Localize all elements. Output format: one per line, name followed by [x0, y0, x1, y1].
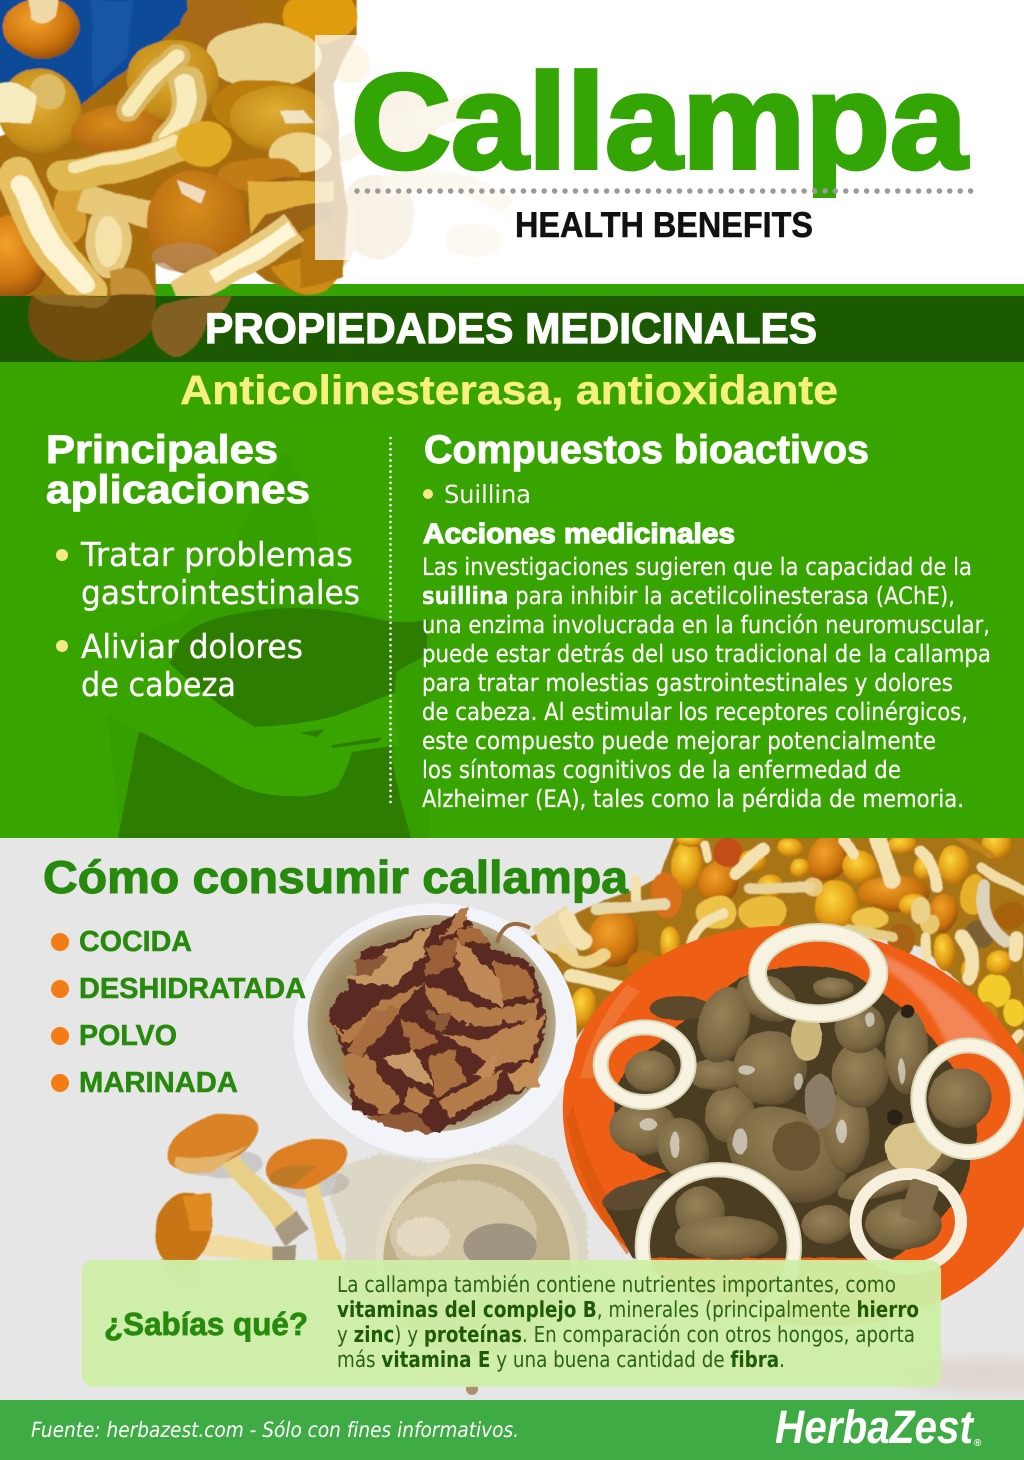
list: aplicaciones — [56, 535, 360, 704]
paragraph: acciones medicinales — [422, 553, 991, 813]
paragraph: acciones medicinales: este compuesto puede mejorar potencialmente — [422, 727, 936, 755]
logo: herbazest: ® — [974, 1438, 982, 1449]
photo: mushrooms top left — [0, 0, 507, 300]
list: aplicaciones: gastrointestinales — [81, 573, 360, 612]
blue cloth — [0, 0, 188, 107]
small drop under callout — [466, 1387, 478, 1395]
footer bar — [0, 1400, 1024, 1460]
braised mushrooms — [598, 965, 992, 1260]
bowl of dried mushrooms — [293, 903, 577, 1158]
callout text: vitaminas del complejo B, minerales (principalmente hierro — [337, 1298, 919, 1323]
compound: suillina: Suillina — [444, 480, 531, 509]
callout text: más vitamina E y una buena cantidad de fibra. — [337, 1348, 785, 1373]
paragraph: acciones medicinales: Alzheimer (EA), tales como la pérdida de memoria. — [422, 785, 964, 813]
callout text: y zinc) y proteínas. En comparación con otros hongos, aporta — [337, 1323, 915, 1348]
orange plate — [562, 923, 1024, 1326]
callout heading: ¿Sabías qué? — [104, 1306, 308, 1342]
footer source: Fuente: herbazest.com - Sólo con fines informativos. — [31, 1418, 519, 1442]
callout: sabias que — [82, 1260, 941, 1387]
paragraph: acciones medicinales: de cabeza. Al estimular los receptores colinérgicos, — [422, 698, 968, 726]
dried mushroom curl — [497, 924, 530, 943]
subtitle: HEALTH BENEFITS — [515, 204, 813, 245]
photo: mushrooms and plate — [146, 830, 1024, 1395]
heading: acciones medicinales: Acciones medicinales — [423, 518, 735, 549]
green panel background — [0, 362, 1024, 838]
list: aplicaciones: de cabeza — [81, 665, 236, 704]
callout box — [82, 1260, 941, 1387]
heading: como consumir callampa: Cómo consumir callampa — [43, 851, 628, 903]
heading: principales aplicaciones — [46, 428, 310, 512]
paragraph: acciones medicinales: para tratar molestias gastrointestinales y dolores — [422, 669, 953, 697]
list: forms of consumption: DESHIDRATADA — [79, 973, 306, 1005]
translucent white title panel — [315, 35, 1024, 260]
heading: principales aplicaciones: Principales — [46, 428, 278, 472]
heading: compuestos bioactivos: Compuestos bioactivos — [424, 428, 869, 472]
golden mass base — [0, 0, 357, 300]
logo: herbazest: HerbaZest — [775, 1400, 975, 1453]
subheading: actions: Anticolinesterasa, antioxidante — [180, 367, 838, 413]
dotted title divider — [357, 188, 972, 194]
callout text — [337, 1273, 919, 1373]
grey lower background — [0, 838, 1024, 1400]
list: aplicaciones: Tratar problemas — [80, 535, 353, 574]
list: forms of consumption: POLVO — [79, 1020, 177, 1052]
onion rings — [601, 932, 1018, 1323]
faint mushrooms behind title — [337, 43, 514, 267]
green header strip — [0, 284, 1024, 296]
heading: propiedades medicinales: PROPIEDADES MEDICINALES — [205, 305, 817, 353]
list: aplicaciones: Aliviar dolores — [81, 627, 303, 666]
title: Callampa — [351, 46, 968, 197]
mushrooms under dark band — [29, 296, 233, 362]
background silhouette: person holding stomach — [50, 450, 430, 838]
paragraph: acciones medicinales: los síntomas cognitivos de la enfermedad de — [422, 756, 901, 784]
list: forms of consumption — [51, 926, 306, 1099]
fresh orange mushrooms — [154, 1112, 350, 1266]
list: forms of consumption: COCIDA — [79, 926, 192, 958]
dark green band — [0, 296, 1024, 362]
list: forms of consumption: MARINADA — [79, 1067, 238, 1099]
paragraph: acciones medicinales: suillina para inhibir la acetilcolinesterasa (AChE), — [422, 582, 955, 610]
bowl of mushroom powder — [328, 1142, 590, 1260]
callout text: La callampa también contiene nutrientes importantes, como — [337, 1273, 896, 1298]
heading: principales aplicaciones: aplicaciones — [46, 468, 310, 512]
background pile of golden mushrooms — [530, 830, 1024, 1065]
plate shadow — [895, 1357, 1024, 1393]
